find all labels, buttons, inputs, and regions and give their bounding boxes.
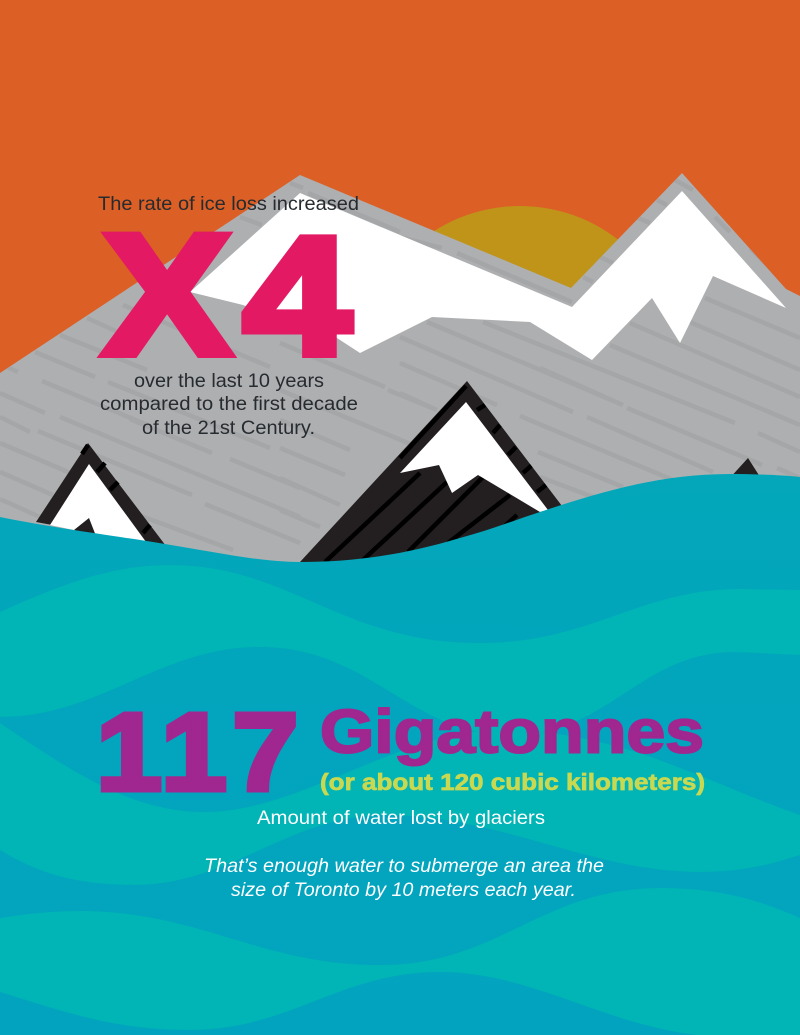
italic note: Toronto comparison: size of Toronto by 10 meters each year. (231, 880, 576, 901)
inner rock of small left peak (74, 518, 96, 536)
big stat: X4 (103, 199, 351, 391)
italic note: Toronto comparison (204, 856, 604, 901)
wave band two (0, 723, 800, 885)
snow on small left peak (50, 464, 149, 546)
big stat: 117: 117 (96, 691, 304, 814)
wave bands (0, 565, 800, 1035)
text: comparison to first decade: over the last 10 years (134, 371, 324, 392)
text: comparison to first decade: of the 21st Century. (142, 418, 315, 439)
snow on large dark peak (400, 402, 548, 512)
sun (360, 206, 680, 526)
text: comparison to first decade: compared to the first decade (100, 394, 358, 415)
back mountain range (0, 173, 800, 562)
heading line: rate of ice loss: The rate of ice loss increased (98, 194, 359, 215)
subtitle: cubic kilometers: (or about 120 cubic kilometers) (320, 769, 705, 795)
small left peak (36, 443, 166, 546)
small right peak (728, 458, 762, 480)
water base (0, 474, 800, 1035)
wave band one (0, 565, 800, 735)
big stat: X4: 4 (243, 202, 351, 390)
caption: amount of water lost: Amount of water lost by glaciers (257, 808, 545, 829)
snow cap on back range (190, 191, 786, 360)
wave band three (0, 888, 800, 1035)
text: comparison to first decade (100, 371, 358, 439)
unit: Gigatonnes: Gigatonnes (320, 698, 704, 766)
italic note: Toronto comparison: That’s enough water to submerge an area the (204, 856, 604, 877)
big stat: X4: X (103, 199, 231, 391)
large dark peak (300, 381, 562, 562)
